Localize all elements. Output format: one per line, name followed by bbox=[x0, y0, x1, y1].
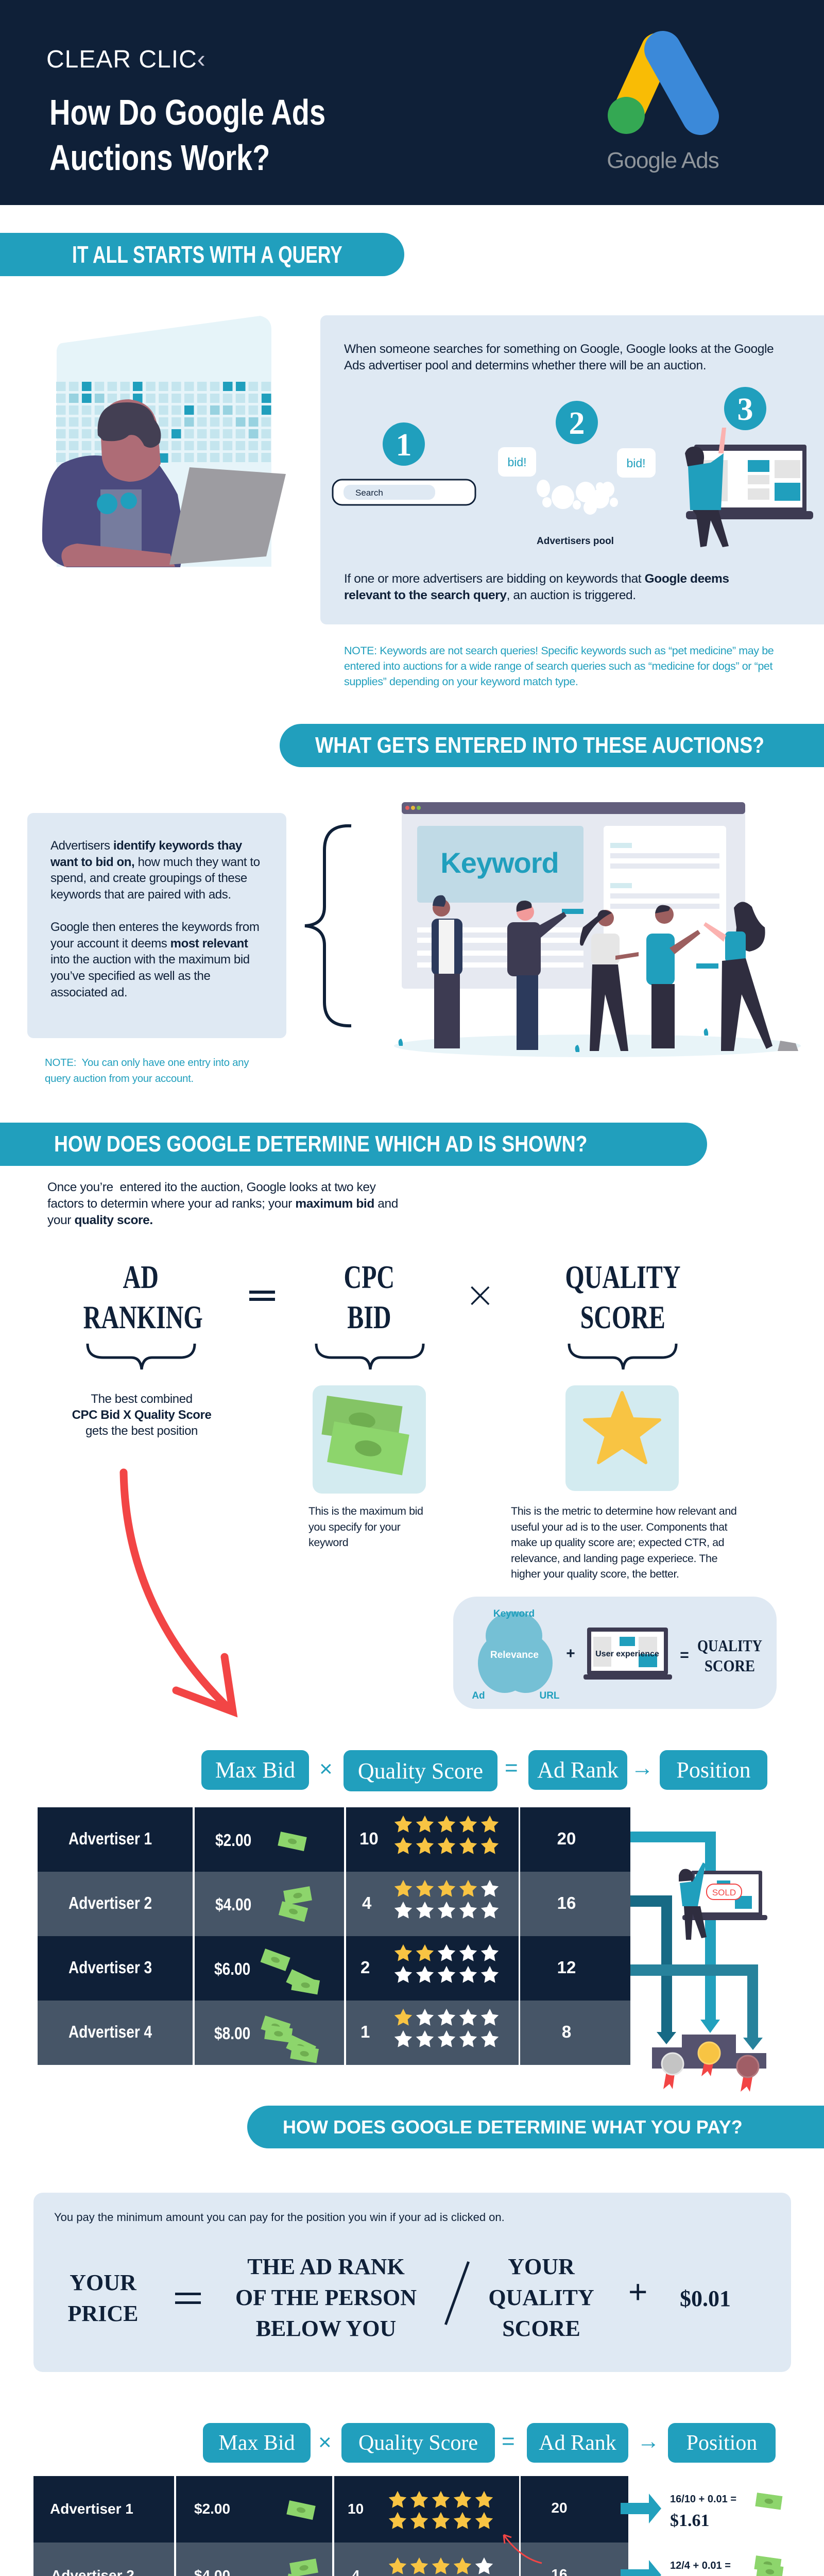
person 5 bbox=[734, 902, 765, 952]
header pills row 2: × bbox=[318, 2430, 332, 2455]
formula bbox=[68, 2270, 138, 2326]
illustration: auction steps bbox=[332, 387, 813, 547]
panel: quality score components: URL bbox=[539, 1690, 560, 1701]
pill: ad rank bbox=[528, 1750, 627, 1790]
panel: price formula: $0.01 bbox=[680, 2286, 731, 2311]
rows text: Advertiser 1 bbox=[50, 2501, 133, 2517]
person 2 bbox=[517, 903, 534, 921]
rows text: 8 bbox=[562, 2022, 571, 2041]
panel: price formula: THE AD RANK bbox=[247, 2254, 405, 2279]
pill: max bid: Max Bid bbox=[218, 2431, 295, 2454]
rows text: 4 bbox=[362, 1893, 371, 1912]
text: triggered: If one or more advertisers are bidding on keywords that Google deems relevant to the search query, an auction is triggered. bbox=[344, 572, 729, 602]
title: Auctions Work? bbox=[49, 138, 270, 178]
illustration: auction steps: 3 bbox=[737, 392, 753, 427]
pill: position: Position bbox=[686, 2431, 757, 2454]
rows text: 2 bbox=[360, 1958, 370, 1977]
banner: what you pay: HOW DOES GOOGLE DETERMINE WHAT YOU PAY? bbox=[283, 2116, 743, 2137]
logo: clear click: CLEAR CLIC‹ bbox=[46, 46, 206, 73]
icon: google ads logo: Google Ads bbox=[607, 148, 719, 173]
caption: best combined: CPC Bid X Quality Score bbox=[72, 1408, 211, 1422]
rows text: Advertiser 3 bbox=[68, 1958, 152, 1977]
term: ad ranking: RANKING bbox=[83, 1299, 203, 1335]
term: quality score: QUALITY bbox=[565, 1259, 680, 1295]
rows text: Advertiser 1 bbox=[68, 1829, 152, 1848]
panel: price formula: + bbox=[628, 2273, 647, 2310]
illustration: people at keyword browser: Keyword bbox=[440, 846, 559, 879]
pill: max bid bbox=[201, 1750, 309, 1790]
header pills row 1: = bbox=[505, 1755, 518, 1781]
operator: times: × bbox=[465, 1274, 495, 1316]
results: arrows and prices: 16/10 + 0.01 = bbox=[670, 2494, 736, 2505]
results: arrows and prices: $1.61 bbox=[670, 2511, 710, 2530]
header pills row 1: × bbox=[319, 1756, 333, 1782]
rows text: 20 bbox=[557, 1829, 576, 1848]
illustration: person on laptop bbox=[42, 316, 286, 567]
panel: price formula bbox=[33, 2193, 791, 2372]
pill: quality score bbox=[344, 1750, 497, 1791]
formula: YOUR bbox=[70, 2270, 136, 2295]
person 4 bbox=[655, 905, 674, 924]
rows text: 1 bbox=[360, 2022, 370, 2041]
banner: it all starts with a query bbox=[0, 233, 404, 276]
results: arrows and prices: 12/4 + 0.01 = bbox=[670, 2560, 731, 2571]
rows text: 12 bbox=[557, 1958, 576, 1977]
panel: quality score components: Relevance bbox=[490, 1650, 539, 1660]
header pills row 1: → bbox=[631, 1755, 654, 1781]
formula: ad ranking = cpc bid x quality score bbox=[83, 1259, 680, 1369]
panel: quality score components: Keyword bbox=[493, 1608, 535, 1619]
panel: price formula: OF THE PERSON bbox=[235, 2285, 417, 2310]
text: intro: When someone searches for something on Google, Google looks at the Google Ads advertiser pool and determins whether there will be an auction. bbox=[344, 342, 774, 372]
panel: advertisers identify keywords: Advertisers identify keywords thay want to bid on, how much they want to spend, and create groupings of these keywords that are paired with ads. bbox=[50, 839, 260, 902]
rows text: 10 bbox=[348, 2501, 364, 2517]
rows text: 16 bbox=[557, 1893, 576, 1912]
rows text: $2.00 bbox=[215, 1831, 251, 1850]
pill: position bbox=[668, 2423, 776, 2463]
header bbox=[0, 0, 824, 205]
banner: which ad is shown bbox=[0, 1123, 707, 1166]
term: quality score bbox=[565, 1259, 680, 1335]
text: maximum bid: This is the maximum bid you specify for your keyword bbox=[308, 1505, 423, 1549]
illustration: auction steps: Advertisers pool bbox=[537, 536, 614, 547]
rows text: $2.00 bbox=[194, 2501, 230, 2517]
illustration: auction steps: Search bbox=[355, 488, 383, 498]
panel: advertisers identify keywords: Google then enteres the keywords from your account it deems most relevant into the auction with the maximum bid you’ve specified as well as the associated ad. bbox=[50, 920, 259, 999]
header pills row 2: = bbox=[502, 2429, 515, 2454]
title bbox=[49, 92, 325, 178]
panel: advertisers identify keywords bbox=[27, 813, 286, 1038]
panel: quality score components bbox=[453, 1597, 777, 1709]
panel: quality score components: User experience bbox=[595, 1650, 659, 1658]
rows text bbox=[68, 1829, 576, 2043]
person 1 bbox=[433, 899, 450, 917]
panel: quality score components: SCORE bbox=[705, 1656, 755, 1675]
icon: google ads logo bbox=[607, 31, 719, 173]
term: ad ranking: AD bbox=[123, 1259, 159, 1295]
operator: equals bbox=[249, 1291, 275, 1301]
stars and money bbox=[261, 1816, 499, 2063]
pill: max bid: Max Bid bbox=[215, 1757, 295, 1783]
note: one entry: NOTE: You can only have one entry into any query auction from your account. bbox=[45, 1057, 249, 1084]
panel: quality score components: = bbox=[680, 1647, 689, 1664]
icon: star box bbox=[565, 1385, 679, 1491]
stars, money, red arrows bbox=[286, 2491, 542, 2576]
pill: quality score: Quality Score bbox=[358, 1758, 483, 1784]
rows text: $6.00 bbox=[214, 1959, 250, 1978]
text: quality score definition: This is the metric to determine how relevant and useful your ad is to the user. Components that make up quality score are; expected CTR, ad relevance, and landing page experiece. The higher your quality score, the better. bbox=[511, 1505, 736, 1580]
rows text: Advertiser 4 bbox=[68, 2022, 152, 2041]
formula: PRICE bbox=[68, 2301, 138, 2326]
panel: price formula: BELOW YOU bbox=[256, 2316, 396, 2341]
pill: max bid bbox=[203, 2423, 311, 2463]
term: cpc bid: CPC bbox=[344, 1259, 394, 1295]
pill: ad rank bbox=[527, 2423, 628, 2463]
pill: position bbox=[660, 1750, 767, 1790]
panel: price formula: YOUR bbox=[508, 2254, 575, 2279]
arrow: red curved bbox=[119, 1468, 238, 1718]
banner: which ad is shown: HOW DOES GOOGLE DETERMINE WHICH AD IS SHOWN? bbox=[54, 1131, 587, 1157]
illustration: people at keyword browser bbox=[394, 802, 801, 1057]
results: arrows and prices bbox=[621, 2493, 784, 2576]
rows text bbox=[50, 2500, 568, 2576]
rows text: $8.00 bbox=[214, 2024, 250, 2043]
person 3 bbox=[597, 910, 614, 926]
term: cpc bid bbox=[344, 1259, 394, 1335]
illustration: arrows to podium: SOLD bbox=[712, 1888, 736, 1897]
panel: quality score components: + bbox=[566, 1645, 575, 1662]
pill: position: Position bbox=[676, 1757, 751, 1783]
header pills row 2 bbox=[203, 2423, 776, 2463]
header pills row 2: → bbox=[637, 2429, 660, 2454]
header pills row 1 bbox=[201, 1750, 767, 1791]
banner: it all starts with a query: IT ALL STARTS WITH A QUERY bbox=[72, 241, 342, 268]
illustration: auction steps: 2 bbox=[569, 406, 585, 441]
pill: quality score: Quality Score bbox=[358, 2431, 478, 2454]
term: quality score: SCORE bbox=[580, 1299, 665, 1335]
term: cpc bid: BID bbox=[347, 1299, 391, 1335]
illustration: arrows to podium bbox=[630, 1832, 767, 2092]
rows text: 20 bbox=[551, 2500, 568, 2516]
icon: money box bbox=[313, 1385, 426, 1494]
text: two key factors: Once you’re entered ito the auction, Google looks at two key factors to determin where your ad ranks; your maximum bid and your quality score. bbox=[47, 1180, 398, 1227]
panel: price formula: SCORE bbox=[502, 2316, 580, 2341]
banner: what gets entered: WHAT GETS ENTERED INTO THESE AUCTIONS? bbox=[315, 733, 764, 758]
banner: what you pay bbox=[247, 2106, 824, 2148]
panel: price formula: QUALITY bbox=[488, 2285, 594, 2310]
pill: ad rank: Ad Rank bbox=[539, 2431, 616, 2454]
rows text: Advertiser 2 bbox=[68, 1893, 152, 1912]
pill: quality score bbox=[341, 2423, 495, 2463]
illustration: auction steps: bid! bbox=[626, 456, 646, 470]
title: How Do Google Ads bbox=[49, 92, 325, 132]
panel: query explanation bbox=[320, 315, 824, 624]
text: minimum amount: You pay the minimum amount you can pay for the position you win if your ad is clicked on. bbox=[54, 2211, 505, 2224]
icon: curly brace bbox=[305, 824, 351, 1027]
illustration: auction steps: bid! bbox=[507, 455, 527, 469]
term: ad ranking bbox=[83, 1259, 203, 1335]
panel: quality score components: QUALITY bbox=[697, 1636, 762, 1655]
rows text: 10 bbox=[359, 1829, 379, 1848]
note: keywords vs queries: NOTE: Keywords are not search queries! Specific keywords such as “pet medicine” may be entered into auctions for a wide range of search queries such as “medicine for dogs” or “pet supplies” depending on your keyword match type. bbox=[344, 645, 774, 688]
table: ad rank bbox=[38, 1807, 630, 2065]
banner: what gets entered bbox=[280, 724, 824, 767]
rows text: $4.00 bbox=[215, 1895, 251, 1914]
illustration: auction steps: 1 bbox=[396, 428, 412, 463]
pill: ad rank: Ad Rank bbox=[537, 1757, 619, 1783]
caption: best combined: The best combined bbox=[91, 1392, 193, 1406]
table: what you pay bbox=[33, 2476, 628, 2576]
caption: best combined bbox=[72, 1392, 211, 1438]
panel: quality score components: Ad bbox=[472, 1690, 485, 1701]
caption: best combined: gets the best position bbox=[85, 1424, 198, 1438]
